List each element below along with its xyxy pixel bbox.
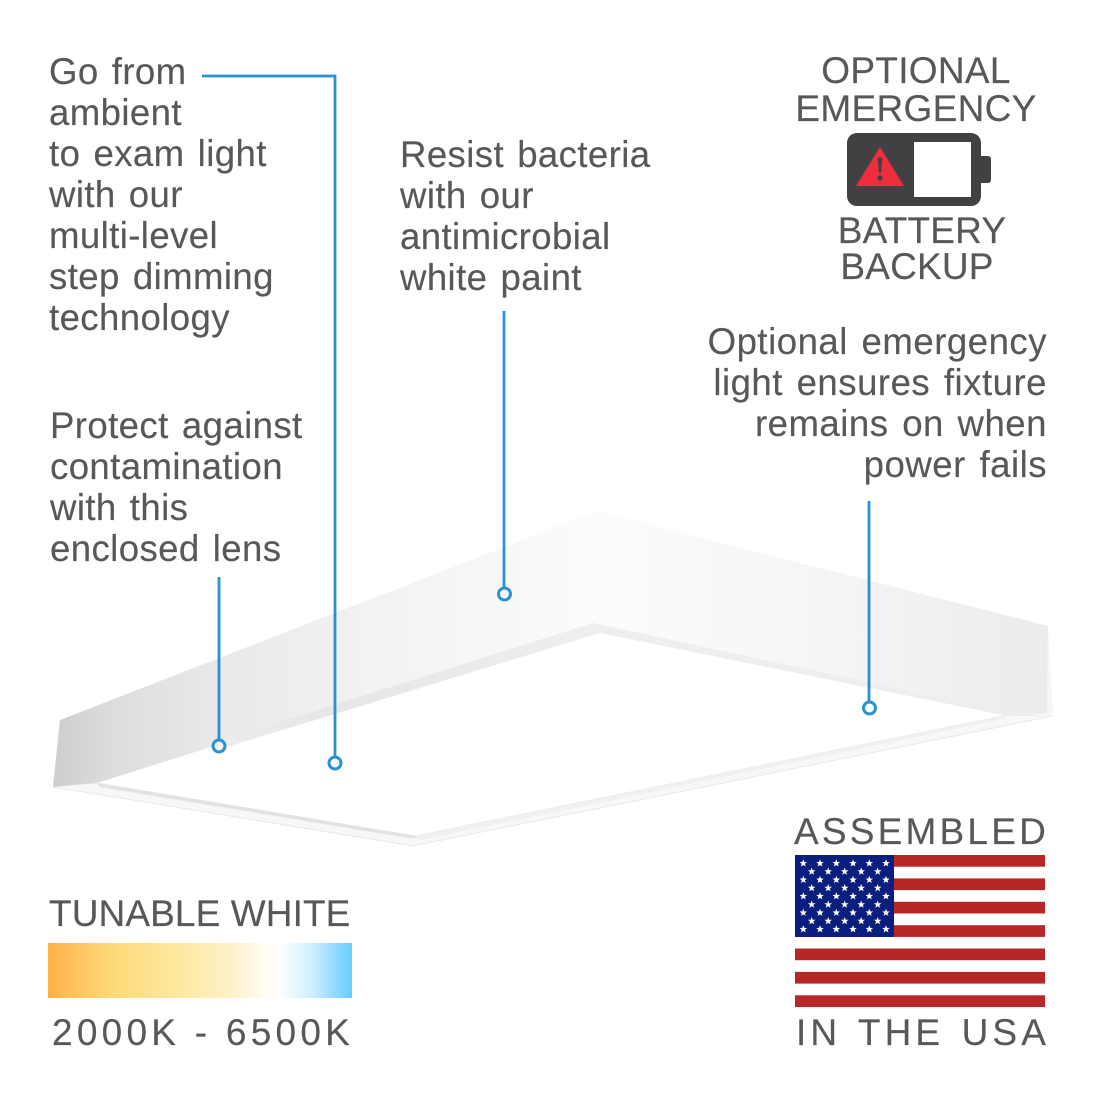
- label: color temperature range: 2000K - 6500K: [52, 1012, 354, 1053]
- callout: enclosed lens text: with this: [50, 487, 188, 528]
- leader: antimicrobial paint: [498, 311, 510, 600]
- callout: emergency light text: Optional emergency: [708, 321, 1047, 362]
- callout: emergency light text: [708, 321, 1047, 485]
- heading: optional emergency: EMERGENCY: [795, 88, 1037, 129]
- callout: enclosed lens text: Protect against: [50, 405, 303, 446]
- callout: step dimming text: [48, 51, 274, 338]
- callout: emergency light text: power fails: [864, 444, 1047, 485]
- heading: tunable white: TUNABLE WHITE: [49, 893, 350, 934]
- heading: assembled: ASSEMBLED: [794, 811, 1049, 852]
- callout: antimicrobial paint text: Resist bacteria: [400, 134, 651, 175]
- callout: antimicrobial paint text: antimicrobial: [400, 216, 611, 257]
- heading: battery backup: BATTERY: [838, 210, 1006, 251]
- callout: enclosed lens text: [50, 405, 303, 569]
- callout: emergency light text: light ensures fixture: [713, 362, 1047, 403]
- callout: antimicrobial paint text: white paint: [400, 257, 582, 298]
- callout: antimicrobial paint text: [400, 134, 651, 298]
- callout: step dimming text: step dimming: [49, 256, 274, 297]
- callout: step dimming text: multi-level: [49, 215, 218, 256]
- heading: battery backup: [838, 210, 1006, 287]
- callout: step dimming text: to exam light: [49, 133, 267, 174]
- heading: battery backup: BACKUP: [840, 246, 994, 287]
- leader: emergency light: [864, 501, 876, 714]
- callout: enclosed lens text: enclosed lens: [50, 528, 281, 569]
- heading: optional emergency: OPTIONAL: [821, 50, 1011, 91]
- callout: emergency light text: remains on when: [755, 403, 1047, 444]
- callout: step dimming text: technology: [49, 297, 230, 338]
- leader: enclosed lens: [213, 577, 225, 752]
- heading: in the usa: IN THE USA: [796, 1012, 1050, 1053]
- callout: step dimming text: with our: [49, 174, 183, 215]
- heading: optional emergency: [795, 50, 1037, 129]
- leader: step dimming: [202, 76, 341, 769]
- callout: enclosed lens text: contamination: [50, 446, 283, 487]
- color temperature gradient bar: [48, 943, 352, 998]
- callout: step dimming text: Go from: [49, 51, 187, 92]
- callout: antimicrobial paint text: with our: [400, 175, 534, 216]
- callout: step dimming text: ambient: [49, 92, 182, 133]
